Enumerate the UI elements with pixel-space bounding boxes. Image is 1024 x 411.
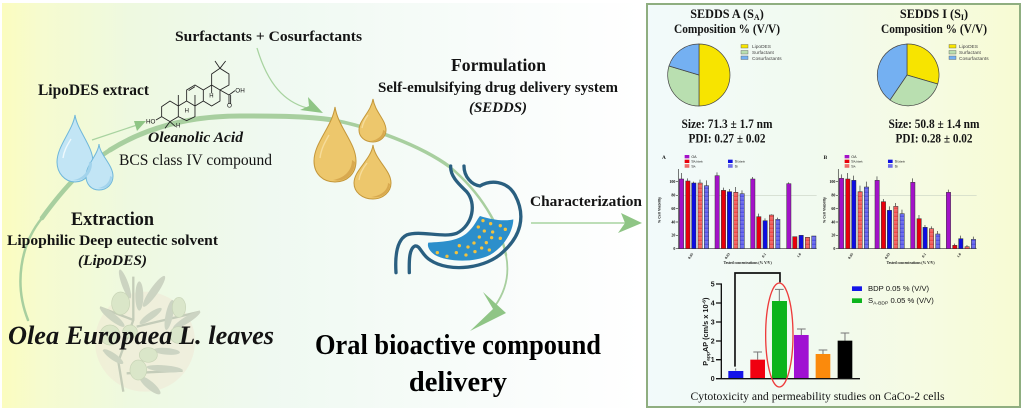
bar chart: permeability: -6 — [702, 300, 708, 304]
legend: SEDDS I: Cosurfactants — [959, 56, 989, 62]
bar chart: A cell viability: 0.1 — [761, 252, 767, 258]
icon: amber SEDDS drops — [314, 99, 391, 199]
icon: oleanolic acid structure: OH — [235, 88, 245, 95]
bar chart: B cell viability: % Cell Viability — [822, 196, 826, 223]
bar chart: permeability: BDP 0.05 % (V/V) — [868, 284, 930, 293]
bar chart: B cell viability: 1.0 — [956, 252, 962, 258]
icon: blue LipoDES drops — [57, 115, 113, 190]
bar chart: A cell viability: 1.0 — [796, 252, 802, 258]
label: LipoDES extract: LipoDES extract — [38, 82, 150, 99]
bar chart: A cell viability: 0.03 — [724, 252, 731, 260]
pie chart: SEDDS I — [877, 44, 939, 106]
bar chart: A cell viability: OA — [691, 155, 697, 159]
bar chart: permeability: 0.05 % (V/V) — [888, 296, 934, 305]
icon: oleanolic acid structure — [146, 61, 245, 130]
arrow: extract to oleanolic acid — [92, 121, 146, 140]
bar chart: A cell viability: SI — [735, 164, 738, 168]
heading: SEDDS I: SEDDS I (S — [900, 7, 961, 21]
icon: oleanolic acid structure: HO — [146, 118, 156, 125]
heading: SEDDS A: A — [754, 13, 760, 22]
label: BCS class: BCS class IV compound — [119, 152, 272, 169]
label: characterization: Characterization — [530, 194, 642, 210]
bar chart: permeability — [701, 273, 934, 387]
bar chart: A cell viability: 100 — [669, 179, 675, 184]
bar chart: B cell viability: 80 — [831, 193, 835, 198]
bar chart: B cell viability: 40 — [831, 219, 835, 224]
arrow: delivery — [470, 292, 506, 331]
bar chart: A cell viability: SA,blank — [691, 160, 703, 164]
bar chart: permeability: S — [868, 296, 873, 305]
bar chart: A cell viability: 0 — [673, 246, 675, 251]
panel: characterization results — [647, 4, 1020, 407]
heading: SEDDS A: SEDDS A (S — [690, 7, 754, 21]
bar chart: permeability: app — [705, 352, 711, 361]
heading: olive leaves: Olea Europaea L. leaves — [8, 321, 274, 350]
bar chart: B cell viability: SA — [851, 164, 856, 168]
bar chart: A cell viability: SA — [691, 164, 696, 168]
icon: oleanolic acid structure: H — [176, 124, 180, 130]
legend: SEDDS A: LipoDES — [752, 44, 771, 50]
bar chart: B cell viability: 20 — [831, 233, 835, 238]
legend: SEDDS I: LipoDES — [959, 44, 978, 50]
heading: formulation: Formulation — [451, 55, 546, 75]
icon: oleanolic acid structure: O — [227, 103, 232, 110]
bar chart: B cell viability: 0.03 — [884, 252, 891, 260]
bar chart: B cell viability: 100 — [829, 179, 835, 184]
bar chart: B cell viability — [822, 155, 977, 265]
bar chart: permeability: 5 — [711, 281, 715, 288]
main process curve — [20, 116, 507, 320]
legend: SEDDS A — [741, 44, 782, 62]
text: size A: Size: 71.3 ± 1.7 nm — [682, 117, 772, 131]
heading: SEDDS A: ) — [760, 7, 764, 21]
arrow: characterization — [531, 213, 642, 233]
bar chart: permeability: AP (cm/s x 10 — [701, 304, 710, 352]
text: lipophilic solvent: Lipophilic Deep eutectic solvent — [7, 233, 218, 249]
bar chart: A cell viability: Tested concentrations (% V/V) — [724, 261, 772, 265]
olive branch illustration — [95, 268, 202, 397]
bar chart: A cell viability: A — [662, 155, 666, 161]
bar chart: A cell viability: 60 — [671, 206, 675, 211]
bar chart: A cell viability: % Cell Viability — [658, 196, 662, 223]
bar chart: permeability: 0 — [711, 376, 715, 383]
text: SEDDS abbreviation: (SEDDS) — [469, 100, 527, 116]
icon: oleanolic acid structure: H — [209, 94, 214, 100]
heading: oral delivery: Oral bioactive compound — [315, 330, 601, 361]
bar chart: permeability: 3 — [711, 319, 715, 326]
bar chart: B cell viability: 0 — [833, 246, 835, 251]
bar chart: B cell viability: SA,blank — [851, 160, 863, 164]
bar chart: B cell viability: B — [824, 155, 828, 161]
bar chart: A cell viability: 0.05 — [687, 252, 694, 260]
bar chart: B cell viability: OA — [851, 155, 857, 159]
heading: surfactants: Surfactants + Cosurfactants — [175, 29, 362, 45]
bar chart: A cell viability: 40 — [671, 219, 675, 224]
bar chart: A cell viability: 80 — [671, 193, 675, 198]
icon: oleanolic acid structure: H — [185, 109, 189, 115]
bar chart: B cell viability: 0.1 — [921, 252, 927, 258]
bar chart: A cell viability — [658, 155, 817, 265]
heading: SEDDS I: ) — [964, 7, 968, 21]
bar chart: permeability: 1 — [711, 357, 715, 364]
heading: composition I: Composition % (V/V) — [881, 22, 987, 36]
heading: delivery line: delivery — [409, 367, 507, 398]
legend: SEDDS I — [949, 44, 989, 62]
bar chart: B cell viability: Tested concentrations (% V/V) — [887, 261, 935, 265]
bar chart: permeability: P — [701, 361, 710, 366]
icon: stomach — [396, 166, 521, 273]
arrow: surfactants to formulation — [257, 48, 323, 113]
legend: SEDDS A: Cosurfactants — [752, 56, 782, 62]
label: oleanolic acid: Oleanolic Acid — [148, 130, 244, 146]
legend: SEDDS I: Surfactant — [959, 50, 982, 56]
bar chart: permeability: A-BDP — [873, 300, 889, 306]
text: PDI A: PDI: 0.27 ± 0.02 — [688, 132, 766, 146]
background — [2, 3, 642, 408]
text: SEDDS definition: Self-emulsifying drug delivery system — [378, 80, 618, 96]
bar chart: B cell viability: 60 — [831, 206, 835, 211]
bar chart: permeability: ) — [701, 297, 710, 300]
bar chart: B cell viability: SI — [895, 164, 898, 168]
text: PDI I: PDI: 0.28 ± 0.02 — [896, 132, 972, 146]
legend: SEDDS A: Surfactant — [752, 50, 775, 56]
heading: composition A: Composition % (V/V) — [674, 22, 780, 36]
bar chart: B cell viability: 0.05 — [847, 252, 854, 260]
text: LipoDES abbreviation: (LipoDES) — [78, 253, 147, 269]
heading: SEDDS I: I — [961, 13, 964, 22]
bar chart: A cell viability: SI,blank — [735, 160, 746, 164]
bar chart: permeability: 4 — [711, 300, 715, 307]
text: size I: Size: 50.8 ± 1.4 nm — [888, 117, 980, 131]
heading: extraction: Extraction — [71, 210, 155, 230]
pie chart: SEDDS A — [668, 44, 730, 106]
caption: Cytotoxicity and permeability studies on CaCo-2 cells — [690, 389, 945, 403]
bar chart: permeability: 2 — [711, 338, 715, 345]
bar chart: A cell viability: 20 — [671, 233, 675, 238]
bar chart: B cell viability: SI,blank — [895, 160, 906, 164]
